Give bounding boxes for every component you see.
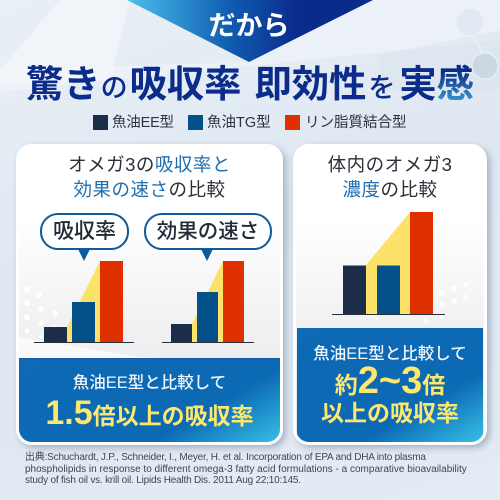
legend item: phospholipid: リン脂質結合型 (305, 115, 406, 131)
legend (93, 114, 406, 131)
band (297, 328, 483, 442)
bars (343, 212, 433, 314)
legend item: TG: 魚油TG型 (207, 115, 271, 131)
band highlight text: 以上の吸収率 (321, 400, 459, 426)
legend item: EE: 魚油EE型 (112, 115, 174, 131)
panel heading: 体内のオメガ3 (328, 154, 452, 175)
bubble: absorption: 吸収率 (53, 220, 116, 243)
panel heading: オメガ3の吸収率と (68, 154, 231, 175)
band text: 魚油EE型と比較して (313, 345, 467, 363)
bubble: speed (144, 213, 272, 250)
band highlight multiplier: 約2~3倍 (335, 360, 445, 402)
bubble: absorption (40, 213, 129, 250)
citation line 3: study of fish oil vs. krill oil. Lipids Health Dis. 2011 Aug 22;10:145. (25, 475, 301, 486)
yellow trend 2 (192, 261, 223, 342)
bars 1 (44, 261, 123, 342)
banner triangle (127, 0, 373, 62)
band highlight: 1.5倍以上の吸収率 (45, 394, 254, 432)
panel heading (328, 154, 452, 200)
band (19, 358, 280, 443)
bubble: speed: 効果の速さ (157, 220, 259, 243)
bar chart: concentration (332, 212, 445, 315)
dot pattern (424, 288, 468, 324)
band text: 魚油EE型と比較して (73, 374, 226, 392)
citation line 2: phospholipids in response to different omega-3 fatty acid formulations - a comparative bioavailability (25, 464, 467, 474)
panel: concentration (293, 144, 487, 445)
bars 2 (171, 261, 244, 342)
panel heading (68, 154, 231, 200)
bar chart: absorption and speed (34, 250, 254, 343)
panel heading: 効果の速さの比較 (73, 179, 226, 200)
banner text: だから (208, 11, 290, 41)
title: 驚きの吸収率 即効性を実感 (26, 63, 474, 105)
dot pattern (24, 286, 58, 339)
citation line 1: 出典:Schuchardt, J.P., Schneider, I., Meyer, H. et al. Incorporation of EPA and DHA into plasma (25, 452, 426, 463)
panel: absorption and speed (16, 144, 283, 445)
yellow trend (366, 212, 410, 314)
yellow trend 1 (67, 261, 100, 342)
citation (25, 451, 467, 486)
white swoosh (19, 337, 150, 358)
panel heading: 濃度の比較 (342, 179, 438, 200)
tails (78, 249, 213, 261)
